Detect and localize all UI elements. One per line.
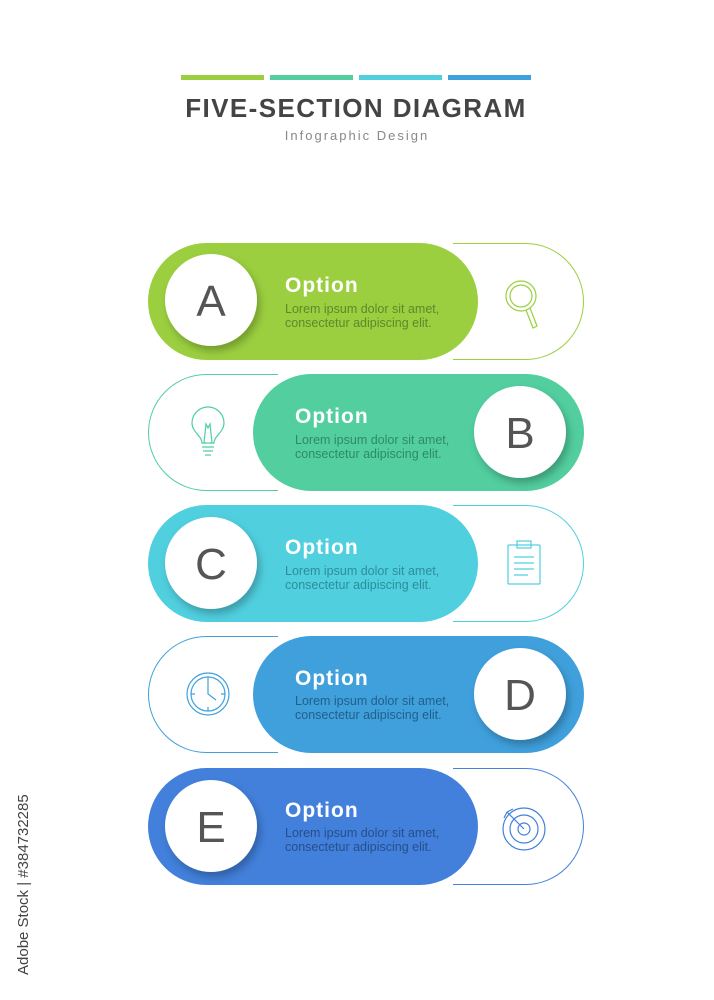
row C: consectetur adipiscing elit. (285, 578, 432, 592)
row B: Option (295, 405, 369, 428)
row D (148, 636, 584, 753)
row C: Option (285, 536, 359, 559)
row E: Lorem ipsum dolor sit amet, (285, 826, 439, 840)
row C: C (195, 540, 227, 589)
icon: target (503, 808, 545, 850)
row C (148, 505, 584, 622)
row A (148, 243, 584, 360)
row E (148, 768, 584, 885)
watermark id: Adobe Stock | #384732285 (15, 794, 32, 975)
row A: Lorem ipsum dolor sit amet, (285, 302, 439, 316)
icon: light bulb (192, 407, 224, 455)
row A: A (196, 277, 226, 326)
row A: consectetur adipiscing elit. (285, 316, 432, 330)
row A: Option (285, 274, 359, 297)
icon: clipboard (508, 541, 540, 584)
header color bars (181, 75, 531, 80)
row B: Lorem ipsum dolor sit amet, (295, 433, 449, 447)
row B: consectetur adipiscing elit. (295, 447, 442, 461)
icon: magnifier (506, 281, 537, 328)
row D: Lorem ipsum dolor sit amet, (295, 694, 449, 708)
row C: Lorem ipsum dolor sit amet, (285, 564, 439, 578)
row D: consectetur adipiscing elit. (295, 708, 442, 722)
icon: clock (187, 673, 229, 715)
row B (148, 374, 584, 491)
row D: Option (295, 667, 369, 690)
row E: E (196, 803, 226, 852)
subtitle: Infographic Design (285, 128, 429, 143)
row B: B (505, 409, 535, 458)
row E: Option (285, 799, 359, 822)
row D: D (504, 671, 536, 720)
title: FIVE-SECTION DIAGRAM (185, 93, 527, 123)
row E: consectetur adipiscing elit. (285, 840, 432, 854)
